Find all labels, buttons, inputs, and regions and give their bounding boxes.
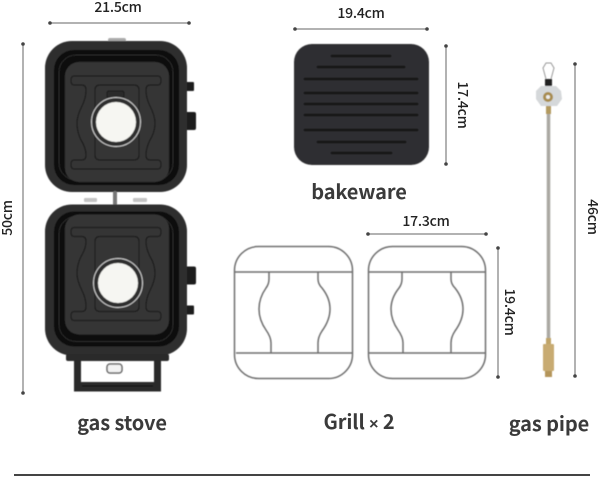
- stove handle: [66, 354, 169, 391]
- stove bottom unit: [45, 204, 196, 356]
- pipe hose: [547, 112, 550, 342]
- grill right: [368, 246, 486, 378]
- dimension: bakeware width: [293, 3, 429, 31]
- bottom rule: [14, 474, 590, 476]
- gas stove product: [45, 38, 196, 391]
- label: gas pipe: gas pipe: [509, 408, 589, 437]
- grill left: [234, 246, 352, 378]
- label: gas stove: gas stove: [77, 407, 167, 436]
- dimension: bakeware width: 19.4cm: [337, 3, 385, 23]
- dimension: stove height: [0, 42, 25, 395]
- dimension: grill width: [366, 211, 488, 236]
- dimension: grill depth: [496, 246, 520, 379]
- dimension: bakeware depth: [444, 44, 473, 166]
- pipe brass connector: [543, 338, 554, 377]
- gas pipe product: [536, 63, 562, 377]
- dimension: grill width: 17.3cm: [402, 211, 450, 231]
- bakeware tray: [294, 44, 429, 165]
- dimension: bakeware depth: 17.4cm: [453, 81, 473, 129]
- label: Grill x 2: Grill × 2: [323, 406, 395, 435]
- dimension: stove width: [48, 0, 191, 25]
- stove top unit: [45, 38, 196, 192]
- hinge: [84, 191, 147, 210]
- pipe top fitting: [536, 63, 562, 114]
- dimension: pipe length: [573, 62, 600, 378]
- dimension: grill depth: 19.4cm: [500, 288, 520, 336]
- label: bakeware: bakeware: [311, 176, 407, 205]
